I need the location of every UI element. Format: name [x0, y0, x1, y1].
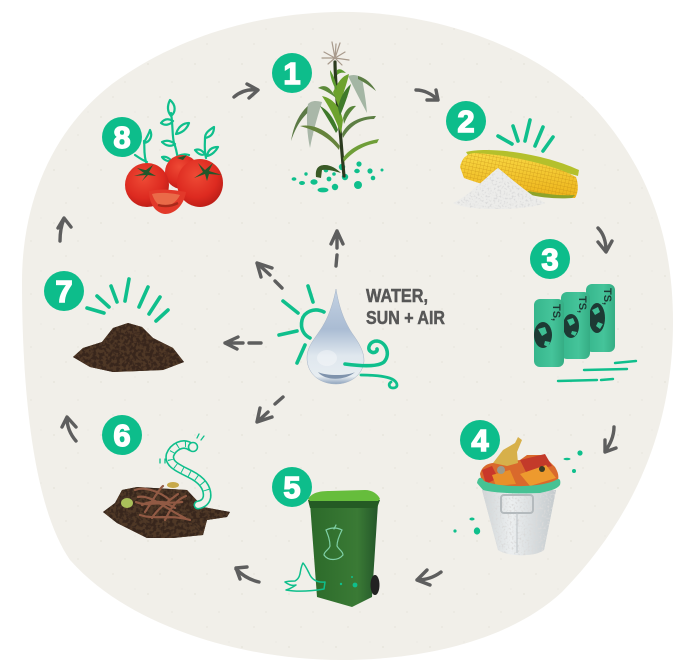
icon: sun [279, 286, 324, 363]
badge 7: 7 [55, 274, 73, 309]
icon: tomato right [177, 159, 223, 207]
step 6: worms in compost [103, 434, 230, 538]
badge 2 [446, 101, 486, 141]
badge 4: 4 [471, 423, 489, 458]
badge 1: 1 [283, 56, 301, 91]
badge 6 [102, 415, 142, 455]
step 8: tomatoes [125, 100, 223, 214]
icon: metal bucket [482, 490, 556, 555]
badge 6: 6 [113, 418, 131, 453]
icon: roll 1: TS, [550, 304, 562, 321]
icon: corn stalk [291, 42, 379, 178]
icon: green soil dots [292, 161, 384, 192]
badge 8 [102, 117, 142, 157]
step 2: corn cob and starch [453, 120, 579, 209]
icon: rays [87, 279, 168, 321]
arrow: step 8 to 1 [234, 84, 258, 98]
step 5: green bin [285, 490, 380, 607]
icon: green splatter [340, 576, 357, 587]
icon: vines [135, 100, 218, 165]
icon: banana peel and scraps [480, 437, 558, 487]
icon: roll 3: TS, [601, 288, 613, 305]
badge 3: 3 [541, 242, 559, 277]
step 7: compost pile [73, 279, 184, 372]
badge 5 [272, 467, 312, 507]
icon: soil mound [73, 323, 184, 372]
icon: apple core line art [324, 525, 343, 560]
icon: wheelie bin body [310, 503, 378, 607]
icon: water drop [307, 289, 364, 384]
centre: water sun air [225, 231, 445, 422]
arrow: left [225, 337, 261, 349]
arrow: lower left [257, 397, 283, 422]
icon: tomato left [125, 163, 169, 207]
icon: worm outline [160, 434, 207, 505]
icon: wheel [370, 575, 380, 595]
arrow: step 5 to 6 [236, 567, 259, 582]
icon: corn cob [460, 150, 579, 198]
icon: green bag rim [477, 478, 560, 493]
arrow: step 1 to 2 [416, 90, 438, 100]
icon: compost scraps [121, 498, 133, 508]
badge 7 [44, 271, 84, 311]
icon: rays [498, 120, 553, 151]
icon: bin rim [308, 500, 380, 508]
arrow: step 7 to 8 [58, 218, 71, 241]
arrow: step 4 to 5 [417, 570, 441, 585]
icon: green dots [453, 450, 583, 535]
icon: worms [135, 486, 190, 520]
heading: water sun air: WATER, [366, 286, 428, 306]
badge 8: 8 [113, 120, 131, 155]
badge 5: 5 [283, 470, 301, 505]
badge 3 [530, 239, 570, 279]
badge 2: 2 [457, 104, 475, 139]
heading: water sun air: SUN + AIR [366, 308, 445, 328]
step 4: bucket with food scraps [453, 437, 583, 555]
step 1: corn plant [291, 42, 384, 192]
arrow: step 3 to 4 [605, 427, 616, 452]
icon: motion lines [558, 361, 636, 381]
icon: tomato calyx [134, 155, 222, 181]
icon: tomato slice [149, 189, 186, 214]
arrow: step 2 to 3 [598, 228, 612, 252]
badge 4 [460, 420, 500, 460]
step 3: compostable bag rolls [534, 284, 636, 381]
icon: tomato middle [165, 155, 199, 189]
arrow: up [331, 231, 343, 266]
icon: compost soil [103, 487, 230, 538]
arrow: upper left [257, 263, 282, 288]
icon: wind [345, 341, 397, 388]
icon: roll 2: TS, [576, 296, 588, 313]
icon: bin lid [308, 490, 380, 501]
icon: starch pile [453, 168, 545, 209]
icon: banana peel line art [285, 563, 325, 591]
arrow: step 6 to 7 [62, 417, 76, 441]
badge 1 [272, 53, 312, 93]
